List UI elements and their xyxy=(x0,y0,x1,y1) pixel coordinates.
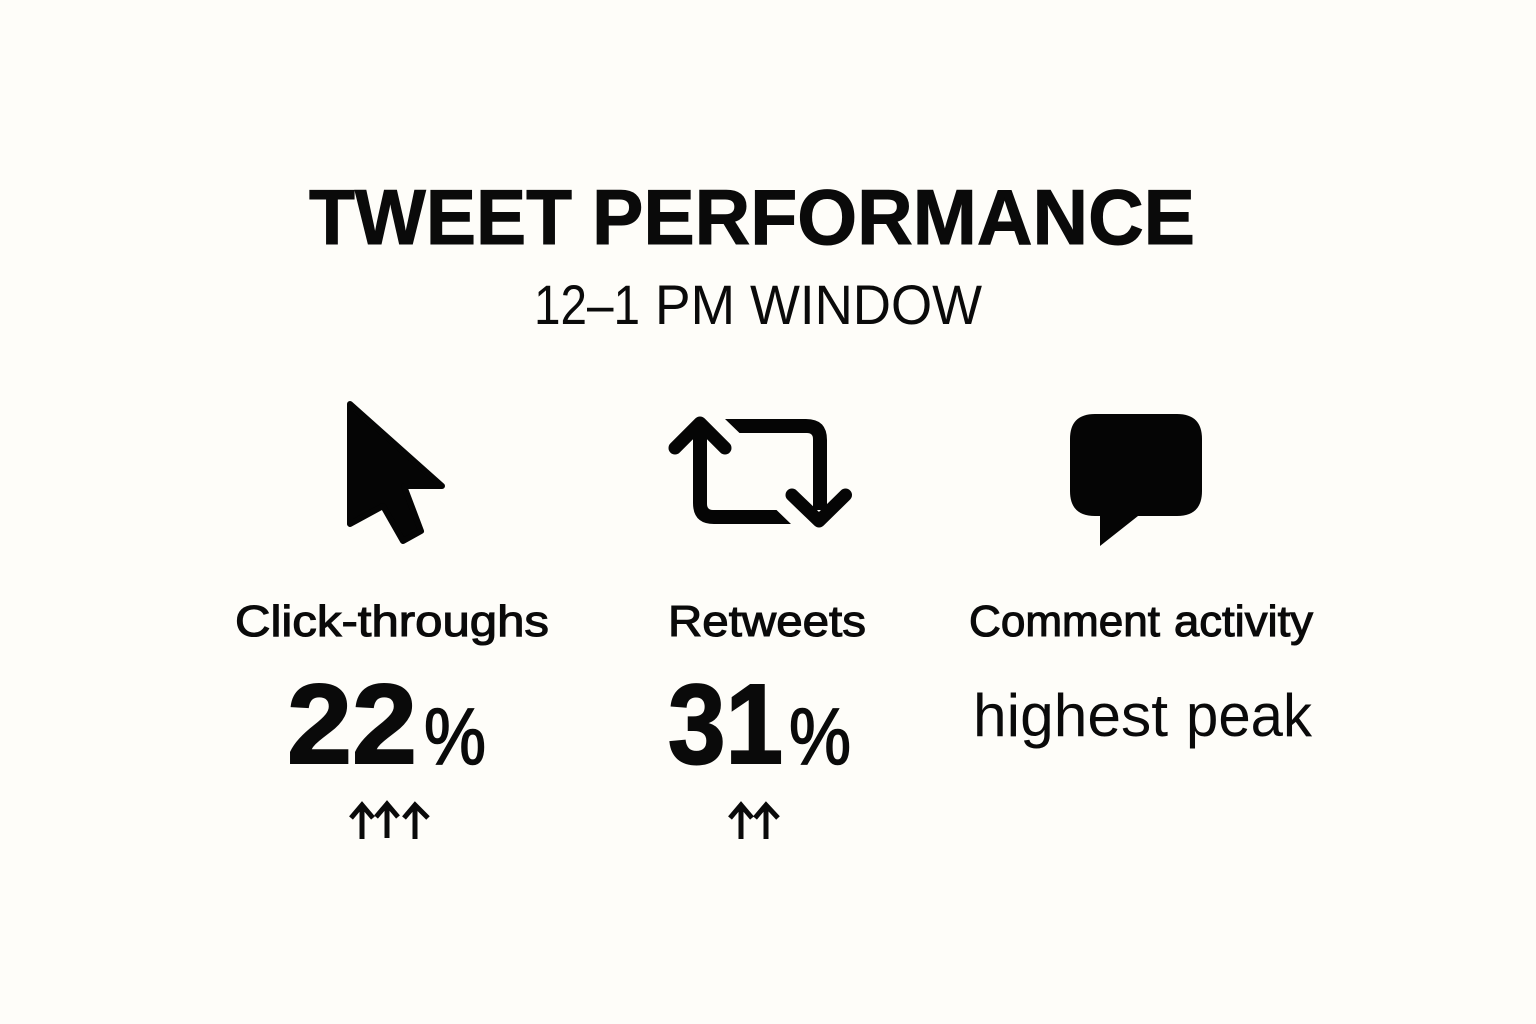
value: highest peak xyxy=(973,682,1313,749)
value: 31 percent: % xyxy=(789,692,851,781)
panel: comment activity xyxy=(969,414,1313,749)
label: retweets: Retweets xyxy=(668,597,866,646)
value: highest peak: peak xyxy=(1186,682,1313,749)
subtitle: WINDOW xyxy=(750,273,982,336)
icon: retweet arrows xyxy=(675,419,846,524)
label: click-throughs: Click-throughs xyxy=(235,597,549,646)
value: 22 percent: 22 xyxy=(287,661,417,787)
subtitle: PM xyxy=(655,273,735,336)
icon: two up arrows xyxy=(730,805,778,839)
subtitle: 12–1 xyxy=(534,273,640,336)
subtitle xyxy=(534,273,982,336)
icon: three up arrows xyxy=(351,804,428,839)
value: 22 percent: % xyxy=(424,692,486,781)
title xyxy=(309,173,1195,261)
label: comment activity: Comment xyxy=(969,597,1160,646)
value: 22 percent xyxy=(287,661,486,787)
panel: click-throughs xyxy=(235,404,549,839)
title: PERFORMANCE xyxy=(592,173,1195,261)
label: comment activity xyxy=(969,597,1313,646)
value: 31 percent: 31 xyxy=(668,661,783,787)
value: highest peak: highest xyxy=(973,682,1168,749)
icon: speech bubble xyxy=(1070,414,1202,546)
value: 31 percent xyxy=(668,661,851,787)
title: TWEET xyxy=(309,173,572,261)
label: comment activity: activity xyxy=(1174,597,1313,646)
icon: cursor xyxy=(350,404,442,541)
panel: retweets xyxy=(668,419,866,839)
